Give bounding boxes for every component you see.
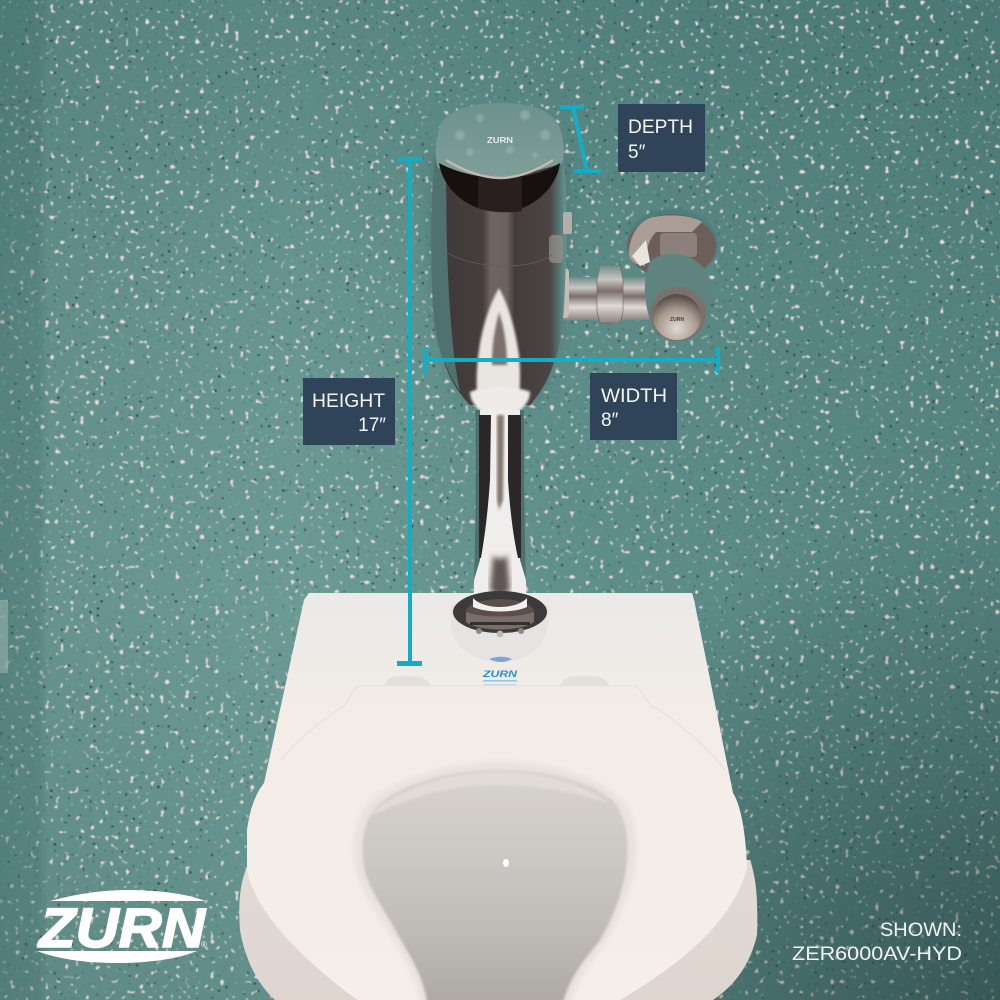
- flange: [453, 591, 547, 637]
- pipe dark reflections: [479, 415, 521, 558]
- handle knob: [650, 287, 706, 341]
- seat outline: [281, 686, 725, 770]
- model caption: ZER6000AV-HYD: [792, 943, 962, 965]
- bowl soft surround shading: [354, 762, 637, 1000]
- toilet lower body: [239, 860, 757, 1000]
- seat mount slots: [384, 676, 609, 686]
- pipe centre stripe: [497, 415, 504, 510]
- coupling nut: [597, 265, 623, 323]
- brand mark on cap: ZURN: [487, 135, 513, 145]
- handle assembly: [562, 209, 718, 341]
- model caption: [792, 919, 962, 965]
- label: height: HEIGHT: [312, 391, 385, 412]
- label: depth: DEPTH: [628, 117, 693, 138]
- top cap: [435, 103, 564, 178]
- blue brand label: ZURN: [482, 669, 518, 680]
- logo: Zurn: ZURN: [37, 896, 207, 959]
- dark sensor window: [439, 163, 560, 212]
- wall escutcheon: [626, 209, 718, 279]
- body rim left: [431, 150, 460, 392]
- toilet tank deck: [287, 593, 714, 700]
- label: width: [590, 373, 677, 440]
- dimension line: height: [397, 157, 422, 666]
- flush valve: [429, 103, 718, 637]
- valve elbow: [645, 254, 711, 326]
- bowl rear ledge: [373, 772, 608, 815]
- main valve body: [431, 150, 566, 405]
- stop collar at tube end: [558, 268, 569, 318]
- label: depth: 5″: [628, 142, 646, 163]
- bowl opening: [363, 770, 627, 1000]
- blue emblem on collar: [489, 657, 512, 662]
- label: width: 8″: [601, 410, 619, 431]
- connector tube: [562, 277, 652, 320]
- dimension line: depth: [560, 105, 601, 173]
- pipe lower dark blot: [490, 555, 510, 596]
- flush pipe: [473, 410, 527, 607]
- label: depth: [618, 104, 705, 172]
- label: height: [303, 378, 395, 445]
- water inlet glint: [503, 859, 509, 867]
- sensor chrome lip: [446, 160, 553, 178]
- blue brand label: [482, 669, 518, 685]
- toilet: [239, 593, 757, 1000]
- model caption: SHOWN:: [880, 919, 962, 941]
- button on side: [563, 212, 572, 234]
- dimension line: width: [424, 347, 720, 373]
- handle assembly: ZURN: [670, 317, 684, 323]
- spud collar: [451, 605, 548, 662]
- toilet top deck and seat: [247, 593, 747, 1000]
- centre reflection on body: [477, 288, 520, 408]
- valve shadow halo: [429, 150, 569, 400]
- lower body collar highlight: [470, 388, 530, 414]
- cap reflections of speckle: [455, 110, 550, 158]
- label: width: WIDTH: [601, 386, 667, 407]
- logo: Zurn: ®: [201, 940, 207, 949]
- label: height: 17″: [358, 415, 386, 436]
- body seam: [446, 252, 552, 266]
